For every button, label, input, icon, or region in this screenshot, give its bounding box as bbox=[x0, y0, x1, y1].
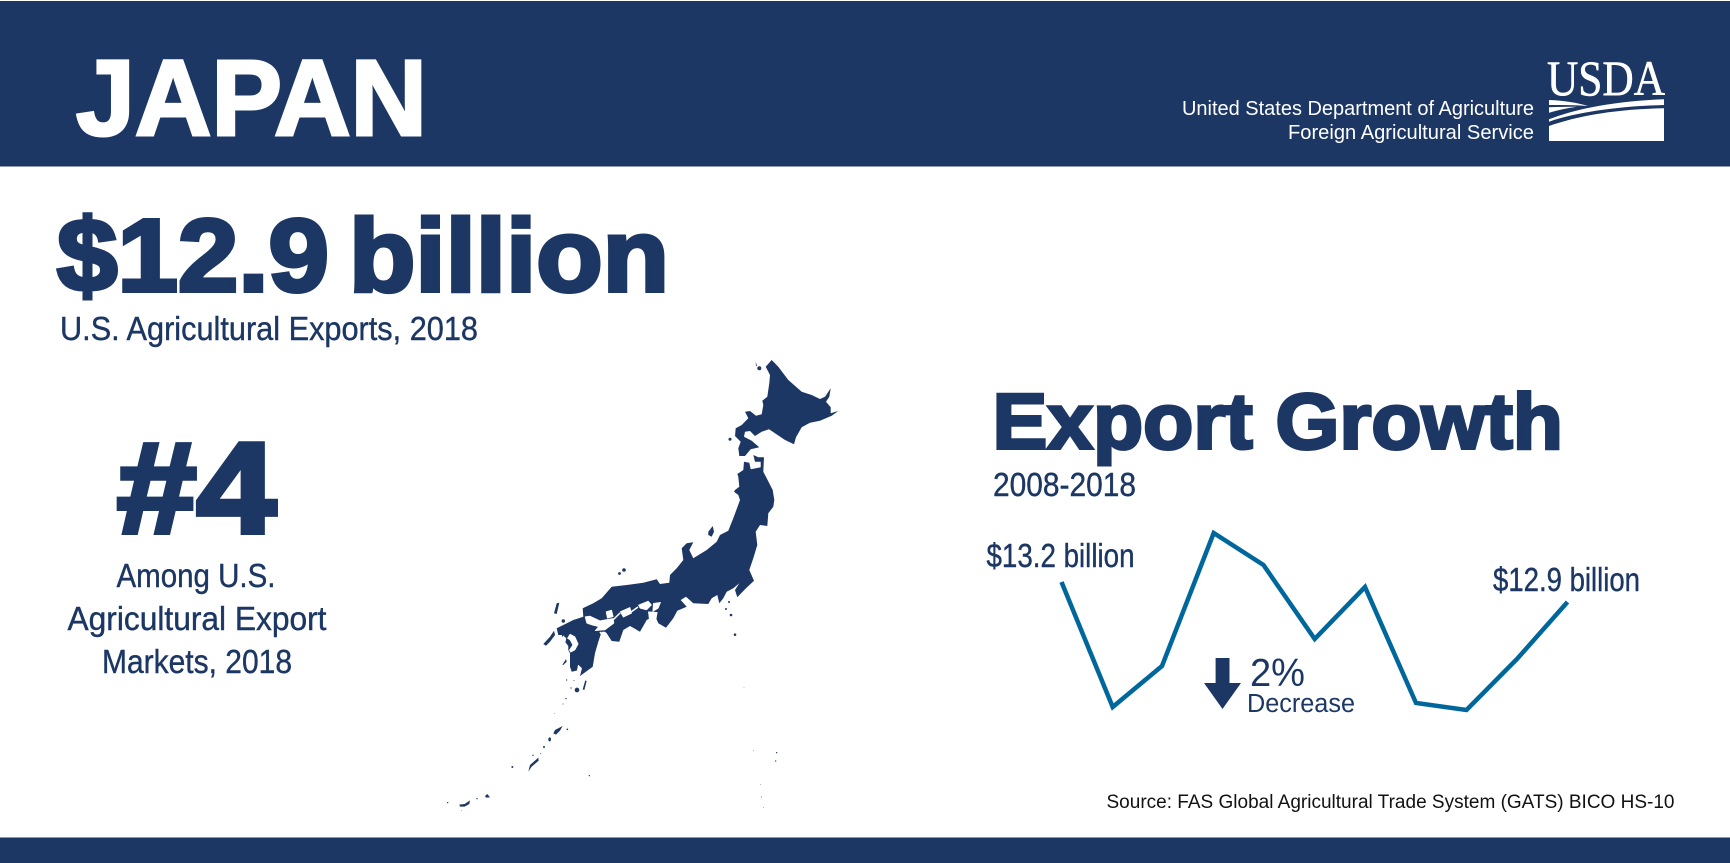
main value: export total: billion bbox=[349, 198, 669, 313]
export trend line bbox=[1062, 533, 1568, 710]
Goto and Koshiki islands bbox=[543, 631, 567, 665]
footer band bbox=[0, 838, 1730, 863]
header band bbox=[0, 1, 1730, 166]
agency name bbox=[1182, 97, 1534, 144]
map of Japan bbox=[447, 360, 838, 811]
USDA logo bbox=[1547, 50, 1665, 141]
title: Japan: JAPAN bbox=[76, 37, 427, 158]
start value label: $13.2 billion bbox=[986, 537, 1134, 574]
agency name: Foreign Agricultural Service bbox=[1288, 121, 1534, 144]
subtitle: U.S. agricultural exports: U.S. Agricultural Exports, 2018 bbox=[60, 311, 478, 348]
USDA logo: USDA bbox=[1547, 50, 1665, 106]
rank block bbox=[68, 416, 327, 681]
source note: Source: FAS Global Agricultural Trade System (GATS) BICO HS-10 bbox=[1106, 792, 1674, 813]
rank description: Among U.S. bbox=[116, 558, 276, 595]
agency name: United States Department of Agriculture bbox=[1182, 97, 1534, 120]
Ryukyu islands bbox=[447, 679, 590, 811]
Tanegashima and Yakushima bbox=[575, 680, 587, 692]
Ogasawara islets bbox=[744, 687, 777, 808]
Seto Inland Sea and bays bbox=[563, 601, 661, 675]
decrease callout bbox=[1204, 652, 1355, 718]
Hokkaido bbox=[735, 360, 838, 456]
northern and central islets bbox=[562, 362, 761, 636]
heading: export growth: Export Growth bbox=[992, 376, 1563, 466]
rank number: #4 bbox=[117, 416, 276, 560]
rank description: Agricultural Export bbox=[68, 601, 327, 638]
Sado island bbox=[708, 526, 714, 537]
subheading: years: 2008-2018 bbox=[993, 467, 1136, 504]
rank description: Markets, 2018 bbox=[102, 644, 292, 681]
Tsushima bbox=[554, 603, 559, 614]
Honshu, Shikoku and Kyushu bbox=[557, 455, 774, 676]
decrease label: Decrease bbox=[1247, 690, 1355, 718]
end value label: $12.9 billion bbox=[1493, 561, 1640, 598]
main value: export total: $12.9 bbox=[57, 198, 329, 313]
rank description bbox=[68, 558, 327, 681]
line chart bbox=[986, 533, 1640, 710]
icon: down arrow bbox=[1204, 658, 1241, 709]
percent change: 2% bbox=[1250, 652, 1305, 695]
main value: export total bbox=[57, 198, 669, 313]
